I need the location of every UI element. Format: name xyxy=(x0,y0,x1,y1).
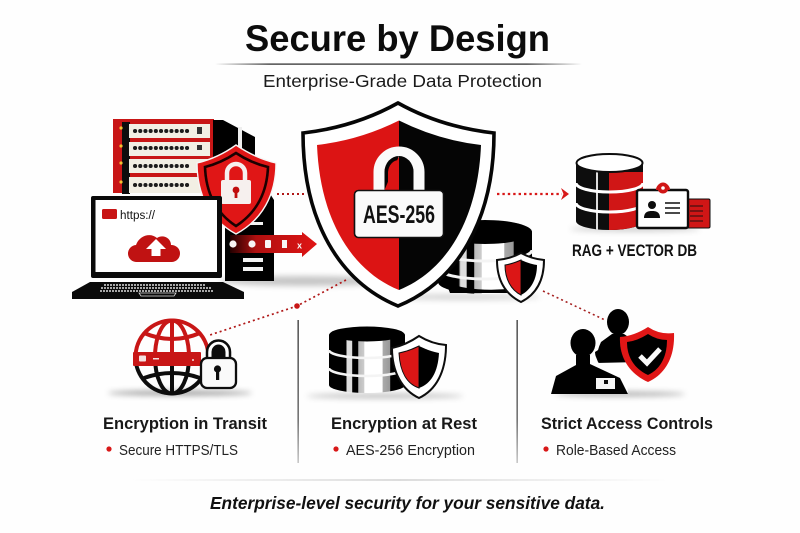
icon: server rack xyxy=(113,119,274,281)
connector: main shield to vector DB xyxy=(497,188,569,200)
heading: Encryption at Rest: Encryption at Rest xyxy=(331,414,477,433)
icon: red shield with padlock xyxy=(197,145,276,234)
bullet dot xyxy=(333,446,339,452)
bullet: AES-256 Encryption: AES-256 Encryption xyxy=(346,443,475,459)
heading: Strict Access Controls: Strict Access Controls xyxy=(541,414,713,433)
label: RAG + VECTOR DB: RAG + VECTOR DB xyxy=(572,241,697,260)
icon: database behind main shield xyxy=(438,220,532,294)
bullet: Secure HTTPS/TLS: Secure HTTPS/TLS xyxy=(119,443,238,459)
footer tagline: Enterprise-level security for your sensitive data. xyxy=(210,493,605,513)
icon: cloud upload xyxy=(128,235,180,262)
ID card xyxy=(637,190,688,228)
red document xyxy=(684,199,710,228)
padlock shackle xyxy=(379,152,419,192)
bullet: Role-Based Access: Role-Based Access xyxy=(556,443,676,459)
https label: https:// xyxy=(120,210,156,222)
arrow: data stream xyxy=(229,232,317,257)
arrow: data stream: x xyxy=(297,240,302,250)
connector: database to access controls xyxy=(543,291,605,320)
bullet dot xyxy=(543,446,549,452)
icon: database with shield xyxy=(329,326,446,398)
subtitle: Enterprise-Grade Data Protection xyxy=(263,71,542,91)
icon: users with shield xyxy=(551,309,674,394)
AES-256 label: AES-256 xyxy=(363,201,435,229)
infographic canvas xyxy=(72,24,712,512)
connector: main shield to globe xyxy=(210,280,346,335)
shield right half xyxy=(399,120,481,290)
icon: RAG vector database xyxy=(576,154,710,230)
shield left half xyxy=(317,120,399,290)
padlock body xyxy=(354,190,444,238)
icon: globe with padlock xyxy=(133,320,236,394)
main shield AES-256 xyxy=(303,103,494,306)
laptop base xyxy=(72,282,244,299)
ground shadows xyxy=(108,226,700,398)
icon: small shield on database xyxy=(497,253,544,302)
title: Secure by Design xyxy=(245,18,550,59)
heading: Encryption in Transit: Encryption in Transit xyxy=(103,414,267,433)
connector: server to main shield xyxy=(277,193,304,195)
bullet dot xyxy=(106,446,112,452)
browser badge xyxy=(102,209,117,219)
icon: laptop xyxy=(72,196,244,299)
